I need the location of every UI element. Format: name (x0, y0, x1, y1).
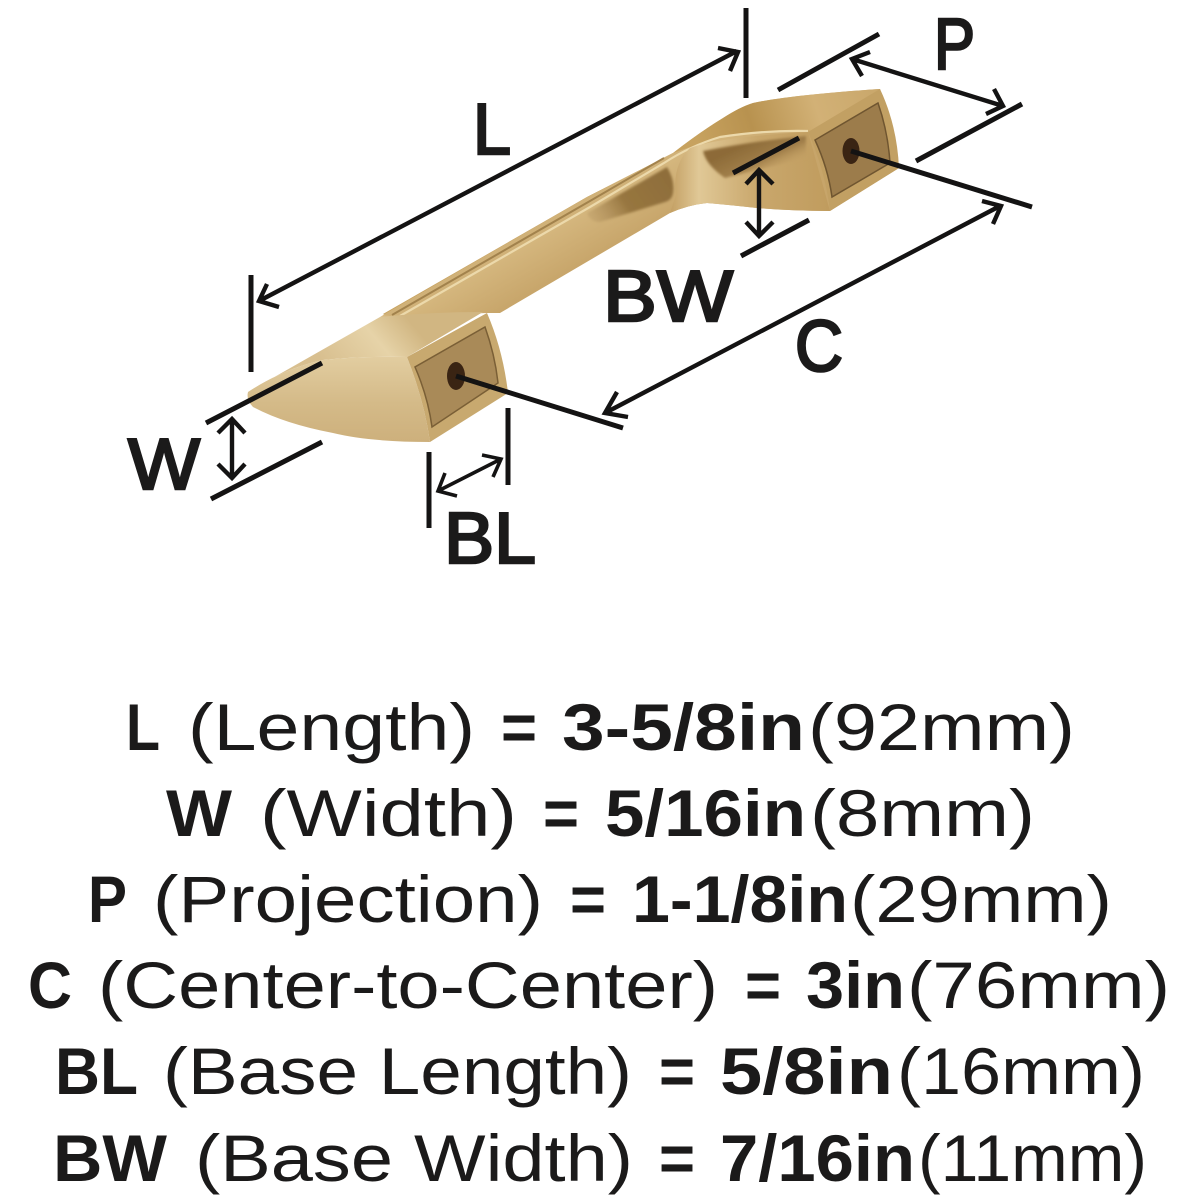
spec line: base width: BW (53, 1121, 168, 1195)
right screw hole (842, 138, 860, 164)
spec line: width: = (543, 776, 579, 850)
dimension L extension lines (251, 8, 746, 372)
pull handle illustration (248, 89, 899, 442)
spec line: base width: (Base Width) (195, 1121, 633, 1195)
spec line: width: W (166, 776, 233, 850)
handle bar body (380, 89, 899, 317)
spec line: center-to-center: C (28, 948, 72, 1022)
right mounting face frame (808, 89, 899, 211)
center line: right hole (851, 151, 1032, 207)
dimension BL extension lines (429, 408, 508, 528)
spec line: center-to-center: (76mm) (907, 948, 1170, 1022)
spec line: base length: BL (55, 1034, 138, 1108)
spec line: projection: 1-1/8in (632, 862, 848, 936)
spec line: center-to-center (28, 948, 1170, 1022)
spec line: length: (92mm) (808, 690, 1075, 764)
handle groove highlight (400, 131, 808, 316)
handle groove lines (392, 158, 664, 315)
spec line: projection (88, 862, 1112, 936)
dimension P extension lines (778, 34, 1022, 161)
spec line: width: (Width) (260, 776, 517, 850)
spec line: center-to-center: = (745, 948, 781, 1022)
spec line: base length: 5/8in (720, 1034, 893, 1108)
spec line: base length: (Base Length) (163, 1034, 632, 1108)
spec line: base length: (16mm) (897, 1034, 1145, 1108)
left mounting face inset (415, 327, 498, 427)
label: L: L (473, 90, 511, 170)
bar shadow recess (587, 167, 673, 222)
spec line: projection: = (570, 862, 606, 936)
label: P: P (934, 5, 975, 85)
spec line: projection: P (88, 862, 127, 936)
left screw hole (447, 362, 465, 390)
right mounting face inset (815, 103, 890, 197)
spec line: projection: (29mm) (850, 862, 1112, 936)
spec line: base width: 7/16in (720, 1121, 915, 1195)
spec line: base width (53, 1121, 1147, 1195)
spec line: base width: = (659, 1121, 695, 1195)
left pier top surface (248, 312, 483, 392)
dimension lines and arrows (206, 8, 1032, 528)
left mounting face frame (407, 313, 508, 442)
handle top strip (383, 89, 880, 317)
label: C: C (795, 307, 843, 387)
handle right pier side (670, 132, 830, 213)
spec line: length: (Length) (188, 690, 475, 764)
arrow: width (218, 419, 245, 478)
spec line: length: 3-5/8in (562, 690, 805, 764)
spec line: base width: (11mm) (918, 1121, 1147, 1195)
dimension BW extension lines (733, 138, 809, 256)
spec line: width (166, 776, 1035, 850)
spec line: length: = (501, 690, 537, 764)
center line: left hole (456, 376, 623, 428)
bar top strip (383, 147, 690, 317)
label: BL: BL (444, 499, 536, 579)
arrow: center-to-center (605, 201, 1001, 417)
spec line: base length: = (659, 1034, 695, 1108)
left pier front surface (248, 357, 430, 442)
spec line: length: L (126, 690, 160, 764)
arrow: base width (746, 170, 773, 236)
spec line: center-to-center: 3in (806, 948, 905, 1022)
label: W: W (128, 425, 200, 505)
label: BW: BW (603, 257, 733, 337)
spec line: width: 5/16in (605, 776, 806, 850)
spec line: width: (8mm) (810, 776, 1035, 850)
arrow: base length (438, 455, 501, 496)
arrow: length (259, 48, 738, 307)
pier shadow recess (703, 136, 806, 178)
spec line: length (126, 690, 1075, 764)
spec line: center-to-center: (Center-to-Center) (98, 948, 718, 1022)
dimension W extension lines (206, 363, 322, 499)
arrow: projection (852, 52, 1003, 114)
spec line: projection: (Projection) (153, 862, 543, 936)
spec line: base length (55, 1034, 1145, 1108)
